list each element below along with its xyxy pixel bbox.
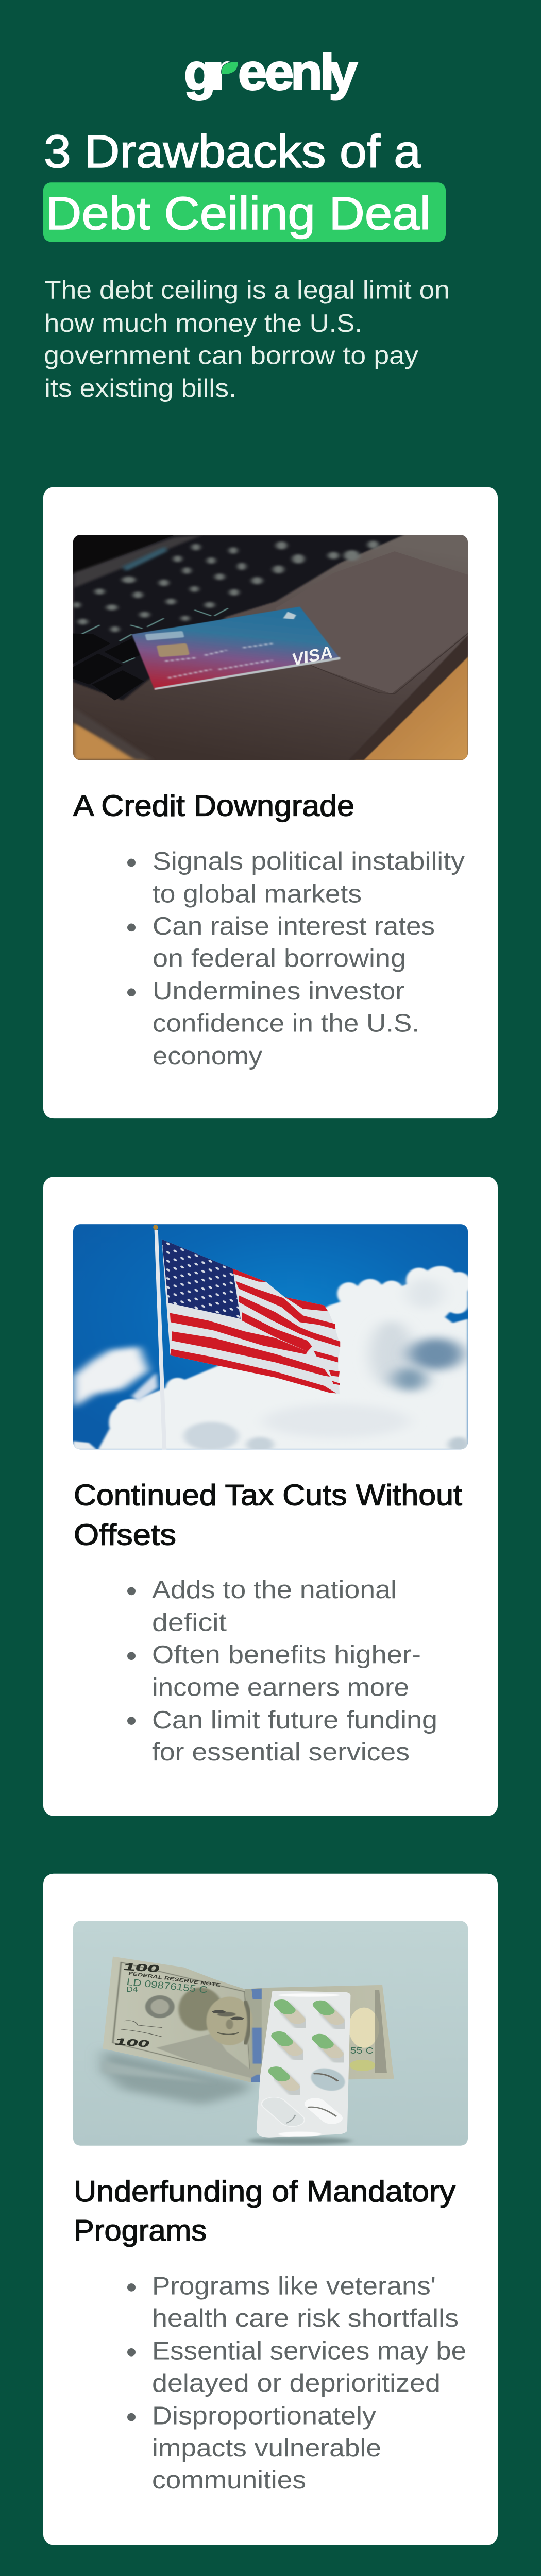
heading bbox=[74, 1479, 462, 1551]
flag bbox=[162, 1239, 340, 1394]
bullet list: Disproportionately bbox=[152, 2402, 376, 2430]
bullet list: Can limit future funding bbox=[152, 1706, 437, 1734]
flag pole bbox=[153, 1225, 166, 1450]
icon: leaf bbox=[222, 62, 238, 74]
bullet list: deficit bbox=[152, 1608, 227, 1636]
bullet list: on federal borrowing bbox=[153, 944, 406, 972]
heading: Continued Tax Cuts Without bbox=[74, 1479, 462, 1512]
bullet list: to global markets bbox=[153, 880, 362, 908]
title: 3 Drawbacks of a bbox=[44, 126, 421, 178]
title bbox=[43, 126, 446, 242]
blister pack bbox=[257, 1991, 351, 2138]
dollar bill: 100 bbox=[113, 2036, 151, 2049]
intro text: The debt ceiling is a legal limit on bbox=[44, 276, 450, 304]
bullet list bbox=[127, 848, 465, 1070]
bullet list: income earners more bbox=[152, 1673, 409, 1701]
bullet list: health care risk shortfalls bbox=[152, 2304, 459, 2332]
intro text: government can borrow to pay bbox=[44, 342, 418, 369]
photo: american flag and clouds bbox=[73, 1224, 471, 1452]
bullet list: Signals political instability bbox=[153, 848, 465, 875]
intro text bbox=[44, 276, 450, 402]
dollar bill: D4 bbox=[126, 1985, 138, 1993]
title highlight: Debt Ceiling Deal bbox=[46, 188, 431, 240]
logo: greenly: greenly bbox=[184, 44, 358, 100]
bullet list: confidence in the U.S. bbox=[153, 1009, 419, 1037]
heading: Programs bbox=[74, 2214, 207, 2247]
bullet list bbox=[127, 1576, 437, 1766]
dollar bill: 100 bbox=[122, 1961, 161, 1974]
bullet list: impacts vulnerable bbox=[152, 2434, 381, 2462]
intro text: how much money the U.S. bbox=[44, 310, 362, 337]
dollar bill: FEDERAL RESERVE NOTE bbox=[128, 1971, 222, 1988]
panel: underfunding of mandatory programs bbox=[43, 1874, 498, 2545]
photo: credit card on laptop bbox=[73, 535, 468, 760]
bullet list: Adds to the national bbox=[152, 1576, 397, 1604]
intro text: its existing bills. bbox=[44, 374, 236, 402]
bullet list: economy bbox=[153, 1042, 262, 1070]
dollar bill: 55 C bbox=[350, 2046, 374, 2056]
dollar bill: LD 09876155 C bbox=[126, 1977, 208, 1995]
dollar bill bbox=[103, 1956, 394, 2082]
heading: A Credit Downgrade bbox=[73, 789, 354, 823]
bullet list: delayed or deprioritized bbox=[152, 2369, 441, 2397]
bullet list: Essential services may be bbox=[152, 2337, 466, 2365]
bullet list: communities bbox=[152, 2466, 306, 2494]
heading: Underfunding of Mandatory bbox=[74, 2175, 456, 2208]
visa logo: VISA bbox=[290, 643, 334, 670]
empty blisters bbox=[274, 2065, 351, 2123]
bullet list: Programs like veterans' bbox=[152, 2272, 436, 2300]
panel: continued tax cuts bbox=[43, 1177, 498, 1816]
photo: dollar bill and pill blister pack bbox=[73, 1921, 468, 2146]
heading bbox=[74, 2175, 456, 2247]
bullet list: Can raise interest rates bbox=[153, 912, 435, 940]
panel: a credit downgrade bbox=[43, 487, 498, 1118]
clouds bbox=[73, 1266, 471, 1452]
capsules bbox=[276, 2004, 341, 2092]
bullet list bbox=[127, 2272, 466, 2494]
credit card bbox=[132, 606, 340, 690]
bullet list: Undermines investor bbox=[153, 977, 404, 1005]
bullet list: for essential services bbox=[152, 1738, 410, 1766]
heading: Offsets bbox=[74, 1518, 176, 1551]
bullet list: Often benefits higher- bbox=[152, 1640, 421, 1669]
